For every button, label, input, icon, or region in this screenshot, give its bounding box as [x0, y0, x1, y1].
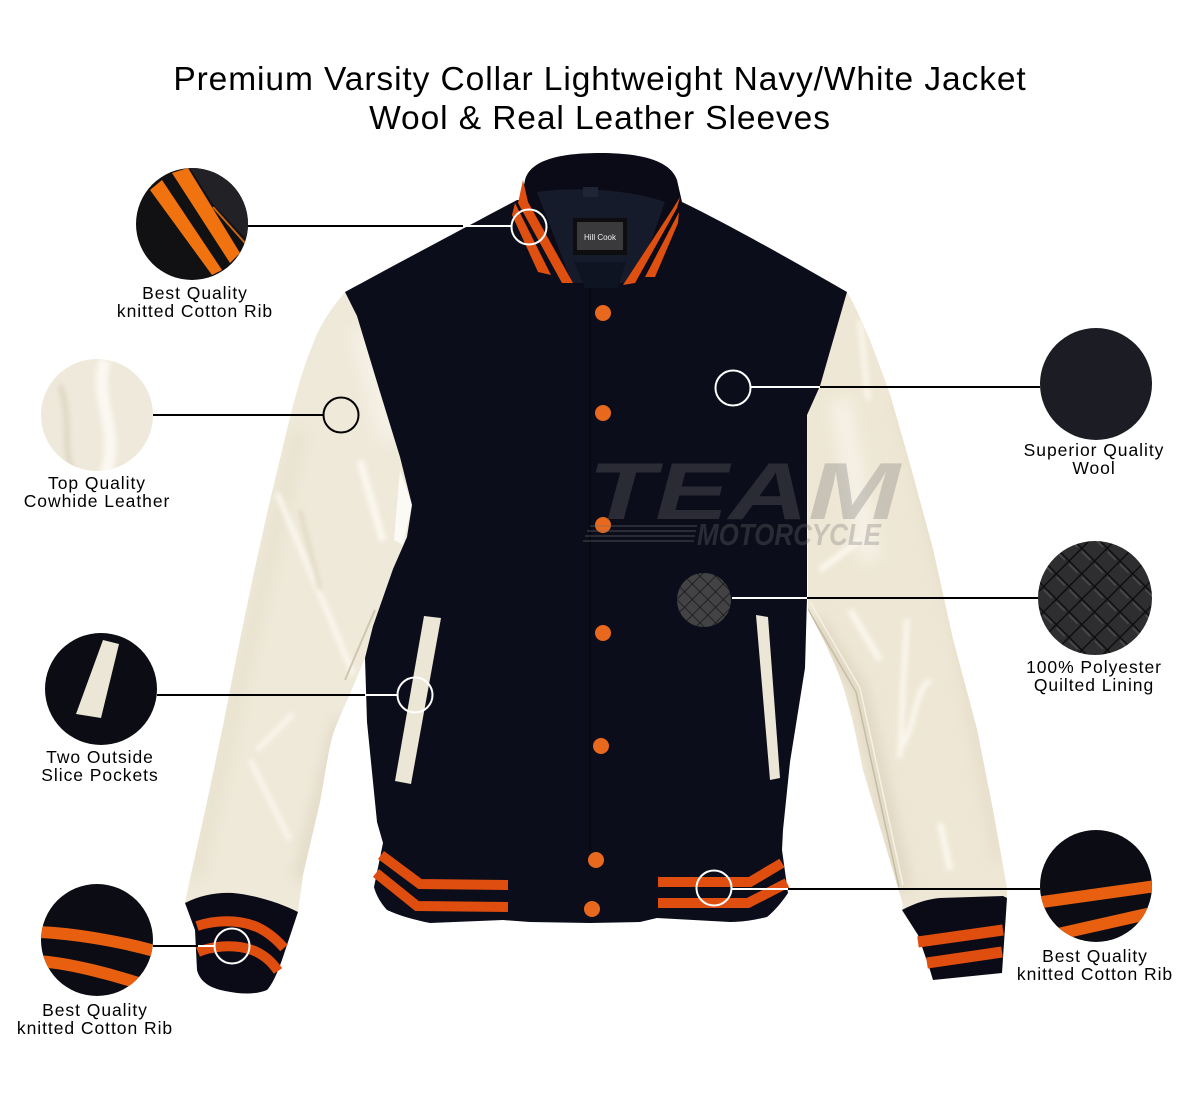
callout: pockets [41, 633, 432, 785]
callout: cuff rib left: knitted Cotton Rib [17, 1018, 173, 1038]
callout: leather [24, 359, 358, 511]
watermark [583, 447, 902, 552]
callout: pockets: Two Outside [46, 747, 154, 767]
callout: leather: Top Quality [48, 473, 146, 493]
collar [512, 153, 682, 288]
title [173, 61, 1027, 137]
size tag [583, 187, 598, 197]
jacket [180, 153, 1015, 994]
hem rib stripes [382, 843, 508, 885]
callout: wool: Wool [1072, 458, 1116, 478]
watermark: MOTORCYCLE [697, 517, 882, 552]
callout: cuff rib left: Best Quality [42, 1000, 148, 1020]
callout: collar rib: knitted Cotton Rib [117, 301, 273, 321]
pockets [395, 616, 441, 784]
callout: quilted lining: Quilted Lining [1034, 675, 1154, 695]
callout: collar rib: Best Quality [142, 283, 248, 303]
left sleeve [180, 285, 420, 915]
brand label: Hill Cook [584, 233, 617, 242]
title: Premium Varsity Collar Lightweight Navy/White Jacket [173, 61, 1027, 98]
right cuff [902, 896, 1007, 980]
callout: hem rib right: knitted Cotton Rib [1017, 964, 1173, 984]
callout: hem rib right: Best Quality [1042, 946, 1148, 966]
callout: collar rib [117, 160, 546, 321]
callout: cuff rib left [17, 884, 250, 1038]
callout: leather: Cowhide Leather [24, 491, 170, 511]
right sleeve [800, 285, 1015, 915]
callout: wool: Superior Quality [1024, 440, 1164, 460]
orange buttons [584, 305, 611, 917]
title: Wool & Real Leather Sleeves [369, 100, 831, 137]
jacket body [345, 200, 847, 923]
brand label [573, 218, 627, 255]
callout: quilted lining: 100% Polyester [1026, 657, 1162, 677]
callout: pockets: Slice Pockets [41, 765, 159, 785]
callout: quilted lining [677, 541, 1162, 695]
callout: wool [716, 328, 1164, 478]
watermark: TEAM [588, 447, 902, 537]
callout: hem rib right [696, 830, 1173, 984]
left cuff [185, 893, 298, 994]
